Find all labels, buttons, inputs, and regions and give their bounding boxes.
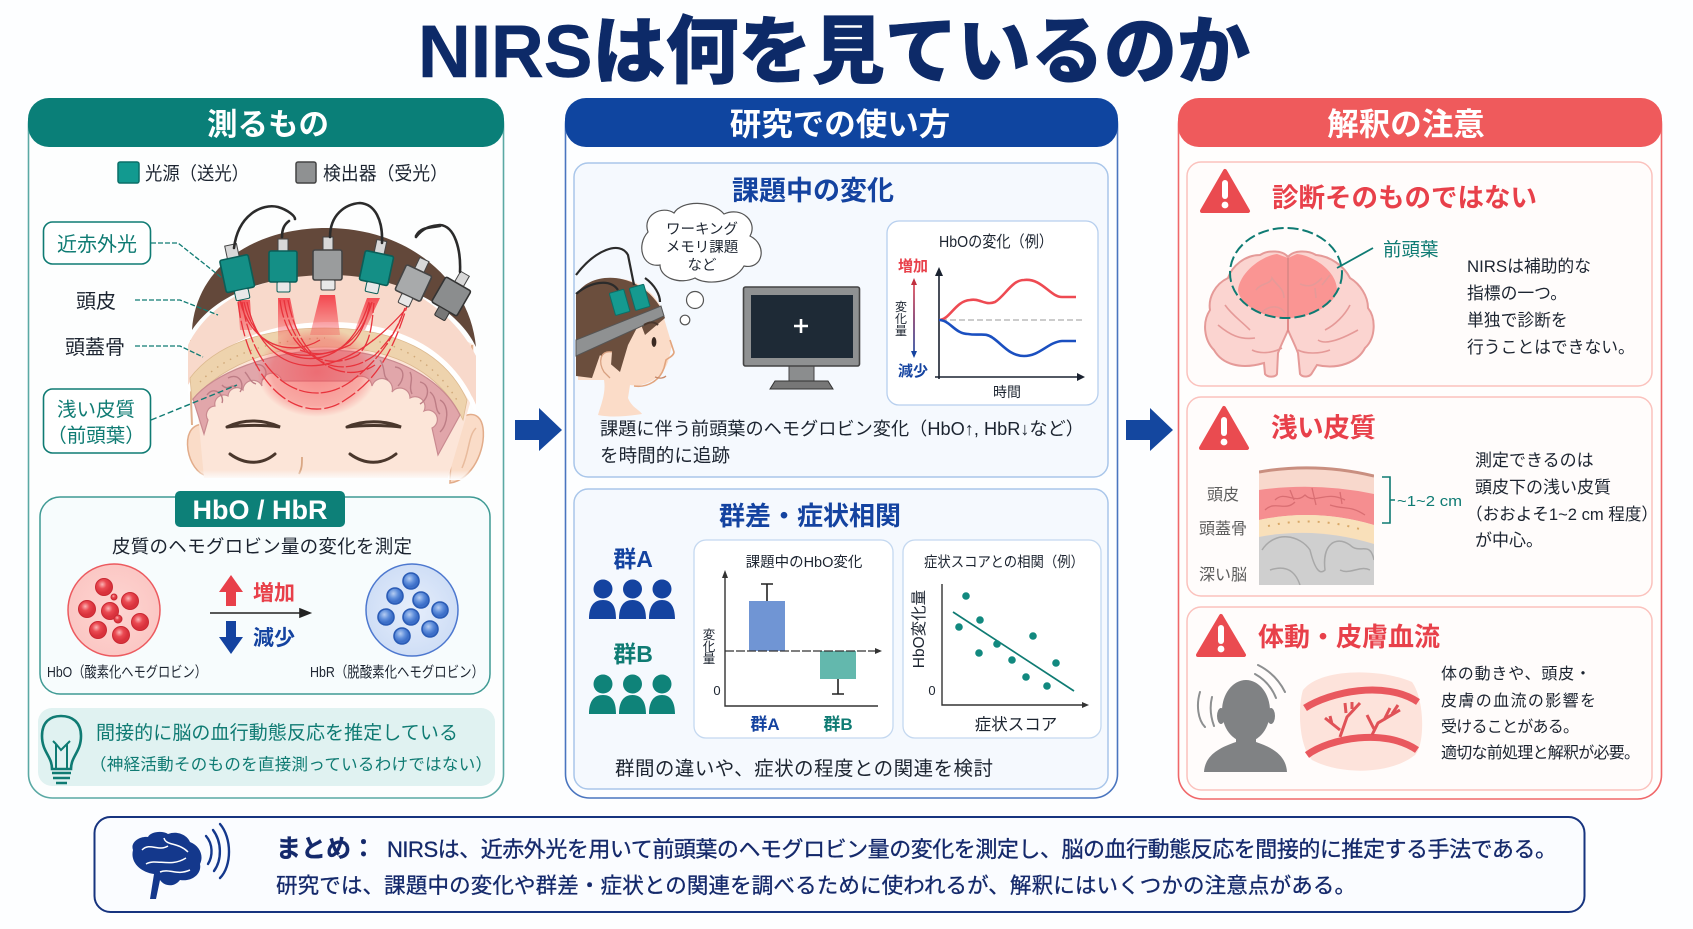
cables	[234, 203, 460, 272]
line chart: HbOの変化: 化	[895, 312, 907, 326]
scalp layer	[188, 273, 478, 410]
text: 測定できるのは	[1475, 451, 1594, 470]
thought bubble	[642, 203, 761, 325]
icon: warning	[1201, 408, 1247, 448]
face features	[227, 421, 401, 462]
summary text: NIRSは、近赤外光を用いて前頭葉のヘモグロビン量の変化を測定し、脳の血行動態反応を間接的に推定する手法である。	[387, 837, 1557, 862]
text	[1466, 451, 1658, 550]
heading: 体動・皮膚血流	[1258, 622, 1440, 652]
line chart: HbOの変化: 減少	[898, 363, 928, 380]
label: 近赤外光	[44, 222, 222, 278]
panel header: 測るもの	[28, 98, 504, 147]
head illustration	[185, 203, 485, 483]
line chart: HbOの変化: 時間	[993, 384, 1021, 400]
label: 頭皮	[76, 290, 218, 315]
scatter chart	[903, 540, 1101, 738]
heading: 浅い皮質	[1271, 413, 1376, 443]
bar chart: 変	[703, 627, 715, 642]
bracket: depth: ~1~2 cm	[1397, 493, 1462, 510]
axis arrow	[210, 609, 310, 617]
panel: 測るもの	[28, 98, 504, 798]
HbR label: HbR（脱酸素化ヘモグロビン）	[310, 664, 484, 681]
person moving	[1198, 665, 1287, 772]
group A	[589, 546, 675, 619]
panel header: 研究での使い方	[565, 98, 1118, 147]
label: 浅い皮質: （前頭葉）	[47, 425, 145, 447]
arrow: to caution panel	[1126, 408, 1173, 451]
label: 浅い皮質: 浅い皮質	[57, 399, 135, 421]
line chart: HbOの変化: 増加	[898, 257, 928, 275]
text	[1441, 665, 1640, 762]
icon: warning	[1198, 616, 1244, 655]
text	[1467, 257, 1635, 357]
panel: 解釈の注意	[1178, 98, 1662, 799]
text: 頭皮下の浅い皮質	[1475, 478, 1611, 497]
line chart: HbOの変化	[887, 221, 1098, 405]
HbO/HbR caption: 皮質のヘモグロビン量の変化を測定	[112, 536, 412, 557]
near infrared beams	[238, 295, 407, 409]
cortex	[193, 350, 460, 455]
head profile	[576, 248, 674, 417]
bar chart	[694, 540, 893, 738]
skull	[190, 328, 467, 420]
layer labels: 深い脳	[1199, 566, 1247, 584]
arrow: to research panel	[515, 408, 562, 451]
panel header: 解釈の注意	[1178, 98, 1662, 147]
label: 頭皮: 頭皮	[76, 290, 116, 313]
bar chart: 量	[703, 652, 715, 666]
heading: 課題中の変化	[732, 176, 894, 206]
callout text	[90, 722, 492, 774]
text: （おおよそ1~2 cm 程度）	[1466, 505, 1658, 524]
face base	[191, 270, 474, 478]
description: を時間的に追跡	[600, 445, 730, 466]
heading: 群差・症状相関	[719, 501, 901, 531]
panel: 研究での使い方	[565, 98, 1118, 798]
dashed ellipse: frontal	[1230, 228, 1342, 318]
text: 適切な前処理と解釈が必要。	[1441, 744, 1640, 762]
text: 受けることがある。	[1441, 718, 1579, 736]
layer labels: 頭蓋骨	[1199, 520, 1247, 538]
summary text: まとめ：	[276, 835, 376, 863]
panel header: 測るもの: 測るもの	[207, 108, 329, 142]
text: 単独で診断を	[1467, 311, 1568, 330]
icon: HbR circle	[366, 564, 458, 656]
text: 皮膚の血流の影響を	[1441, 692, 1596, 710]
panel header: 解釈の注意: 解釈の注意	[1327, 106, 1485, 142]
text: 行うことはできない。	[1467, 338, 1635, 357]
scatter chart: HbO変化量	[910, 590, 928, 668]
label: 前頭葉: 前頭葉	[1383, 239, 1439, 260]
text: NIRSは補助的な	[1467, 257, 1591, 276]
summary box	[94, 817, 1584, 912]
legend	[118, 162, 448, 184]
text: が中心。	[1475, 531, 1543, 550]
label: 頭蓋骨: 頭蓋骨	[65, 336, 125, 359]
icon: light bulb	[42, 716, 81, 783]
description: 課題に伴う前頭葉のヘモグロビン変化（HbO↑, HbR↓など）	[600, 419, 1084, 439]
subpanel: 体動・皮膚血流	[1187, 607, 1652, 790]
description	[600, 419, 1084, 466]
title: NIRSは何を見ているのか	[418, 10, 1250, 93]
layer labels: 頭皮	[1207, 486, 1239, 504]
panel header: 研究での使い方: 研究での使い方	[730, 106, 950, 142]
group A: 群A	[613, 546, 653, 572]
heading: 診断そのものではない	[1272, 183, 1537, 213]
scatter chart: 0	[928, 683, 936, 698]
bar chart: 0	[713, 683, 721, 698]
callout text: 間接的に脳の血行動態反応を推定している	[96, 722, 458, 744]
increase arrow: 増加	[253, 582, 295, 605]
legend: 光源（送光）	[145, 163, 249, 184]
badge: HbO / HbR	[192, 495, 328, 525]
label: 浅い皮質	[44, 385, 237, 453]
bar chart: 化	[703, 640, 716, 654]
HbO/HbR box	[40, 491, 490, 694]
monitor	[744, 287, 860, 389]
sensors	[217, 237, 477, 325]
summary text	[276, 835, 1557, 898]
increase arrow	[219, 575, 295, 606]
bar chart: 課題中のHbO変化	[746, 554, 863, 571]
label: 前頭葉	[1337, 239, 1439, 268]
brain with frontal highlight	[1205, 251, 1374, 377]
label: 近赤外光: 近赤外光	[57, 233, 137, 256]
vessels	[1300, 672, 1422, 771]
legend: 検出器（受光）	[323, 163, 448, 184]
decrease arrow	[219, 621, 295, 654]
layer labels	[1199, 486, 1247, 584]
decrease arrow: 減少	[253, 626, 295, 650]
group B	[589, 641, 675, 714]
badge	[175, 491, 345, 527]
subpanel: 課題中の変化	[574, 163, 1108, 477]
label: 頭蓋骨	[65, 336, 203, 359]
hair	[192, 228, 476, 347]
scatter chart: 症状スコア	[975, 715, 1057, 734]
line chart: HbOの変化: HbOの変化（例）	[939, 233, 1053, 251]
bar chart: 群B	[823, 714, 853, 734]
callout	[38, 708, 495, 786]
thought bubble: ワーキング	[666, 221, 738, 238]
bracket: depth	[1382, 477, 1462, 523]
text: 指標の一つ。	[1467, 284, 1567, 303]
callout text: （神経活動そのものを直接測っているわけではない）	[90, 755, 492, 774]
icon: warning	[1202, 171, 1248, 211]
subpanel: 浅い皮質	[1187, 397, 1658, 596]
summary text: 研究では、課題中の変化や群差・症状との関連を調べるために使われるが、解釈にはいくつかの注意点がある。	[276, 874, 1356, 898]
layer stack	[1259, 468, 1374, 585]
HbO label: HbO（酸素化ヘモグロビン）	[47, 664, 207, 681]
thought bubble: メモリ課題	[666, 240, 738, 256]
subpanel: 群差・症状相関	[574, 489, 1108, 789]
text: 体の動きや、頭皮・	[1441, 665, 1591, 683]
ears	[188, 414, 483, 483]
thought bubble: など	[688, 257, 717, 274]
cortex glow	[257, 327, 377, 417]
bar chart: 群A	[750, 714, 780, 734]
group B: 群B	[613, 641, 653, 667]
line chart: HbOの変化: 量	[895, 324, 907, 338]
line chart: HbOの変化: 変	[895, 299, 907, 314]
icon: brain with signal	[132, 824, 229, 899]
scatter chart: 症状スコアとの相関（例）	[924, 554, 1084, 571]
icon: HbO circle	[68, 564, 160, 656]
description: 群間の違いや、症状の程度との関連を検討	[615, 758, 993, 780]
subpanel: 診断そのものではない	[1187, 162, 1652, 386]
